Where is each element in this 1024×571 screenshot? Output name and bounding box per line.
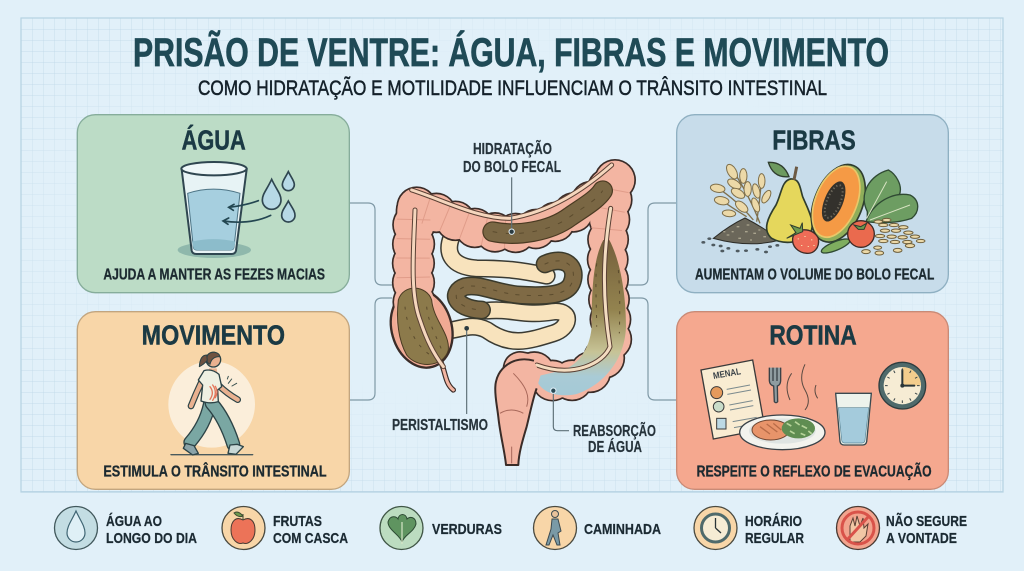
connector lines (349, 203, 677, 400)
panel: rotina (677, 312, 948, 489)
icon: meal plan sheet (701, 360, 765, 439)
caption: rotina: RESPEITE O REFLEXO DE EVACUAÇÃO (697, 463, 932, 481)
arrows: water into glass (223, 201, 271, 224)
panel: água (77, 115, 349, 293)
heading: movimento: MOVIMENTO (142, 319, 285, 350)
large intestine (382, 180, 615, 390)
caption: movimento: ESTIMULA O TRÂNSITO INTESTINAL (103, 463, 327, 481)
icon: clock (879, 362, 926, 409)
tip: horário regular: HORÁRIO (745, 513, 802, 530)
panel: fibras (677, 115, 948, 293)
stool and water: descending colon (536, 240, 626, 395)
tip: frutas com casca: FRUTAS (273, 513, 322, 530)
label: reabsorção de água: REABSORÇÃO (573, 422, 656, 440)
label: hidratação do bolo fecal: HIDRATAÇÃO (473, 140, 552, 158)
label: reabsorção de água (573, 422, 656, 456)
icon: leafy greens (864, 170, 918, 223)
stool speckle (405, 263, 620, 358)
appendix (441, 362, 453, 390)
rectum (495, 359, 541, 465)
tip: frutas com casca: COM CASCA (273, 530, 348, 547)
leader: hidratação (509, 177, 514, 234)
heading: fibras: FIBRAS (772, 124, 856, 155)
leader: peristaltismo (464, 326, 469, 414)
icon: meal plan sheet: MENAL (712, 366, 742, 381)
icon: plate of food (740, 415, 825, 450)
label: reabsorção de água: DE ÁGUA (588, 439, 642, 456)
caption: fibras: AUMENTAM O VOLUME DO BOLO FECAL (695, 266, 934, 283)
tip: caminhada (534, 506, 661, 550)
icon: tomato (848, 221, 874, 247)
tip: água ao longo do dia: ÁGUA AO (106, 513, 162, 530)
icon: glass of water (836, 393, 871, 445)
tip: não segure a vontade: NÃO SEGURE (886, 512, 967, 530)
icon: fork (769, 368, 781, 403)
bottom row: tips (54, 506, 967, 550)
leader: reabsorção (551, 388, 569, 431)
colon diagram (382, 165, 626, 465)
tip: verduras: VERDURAS (432, 521, 502, 538)
stool: ascending colon (397, 288, 448, 364)
icon: water drops (262, 172, 295, 222)
heading: rotina: ROTINA (769, 319, 857, 350)
label: peristaltismo: PERISTALTISMO (392, 417, 488, 434)
tip: frutas com casca (222, 506, 348, 550)
icon: oats (710, 163, 773, 223)
icon: walking woman (168, 352, 255, 455)
icon: strawberry (787, 223, 819, 253)
caption: água: AJUDA A MANTER AS FEZES MACIAS (103, 266, 325, 283)
tip: água ao longo do dia: LONGO DO DIA (106, 530, 197, 547)
tip: verduras (380, 506, 502, 550)
taenia bands (412, 165, 612, 370)
icon: pear (767, 162, 812, 242)
icon: chia pile (701, 218, 780, 253)
icon: steam (787, 364, 818, 410)
icon: lentils (862, 218, 925, 255)
label: hidratação do bolo fecal (463, 140, 561, 176)
icon: glass of water (178, 162, 251, 258)
tip: água ao longo do dia (54, 506, 197, 550)
tip: não segure a vontade (836, 506, 967, 550)
icon: papaya (801, 157, 876, 250)
stool: transverse colon (493, 191, 603, 234)
label: hidratação do bolo fecal: DO BOLO FECAL (463, 159, 561, 176)
tip: horário regular (694, 506, 804, 550)
subtitle: COMO HIDRATAÇÃO E MOTILIDADE INFLUENCIAM O TRÂNSITO INTESTINAL (198, 76, 827, 100)
tip: caminhada: CAMINHADA (584, 521, 661, 538)
heading: água: ÁGUA (182, 124, 246, 155)
icon: cucumber (820, 236, 852, 256)
tip: não segure a vontade: A VONTADE (886, 530, 957, 547)
haustra folds (413, 180, 615, 280)
panel: movimento (77, 312, 349, 489)
tip: horário regular: REGULAR (745, 530, 804, 547)
small intestine (448, 237, 573, 341)
